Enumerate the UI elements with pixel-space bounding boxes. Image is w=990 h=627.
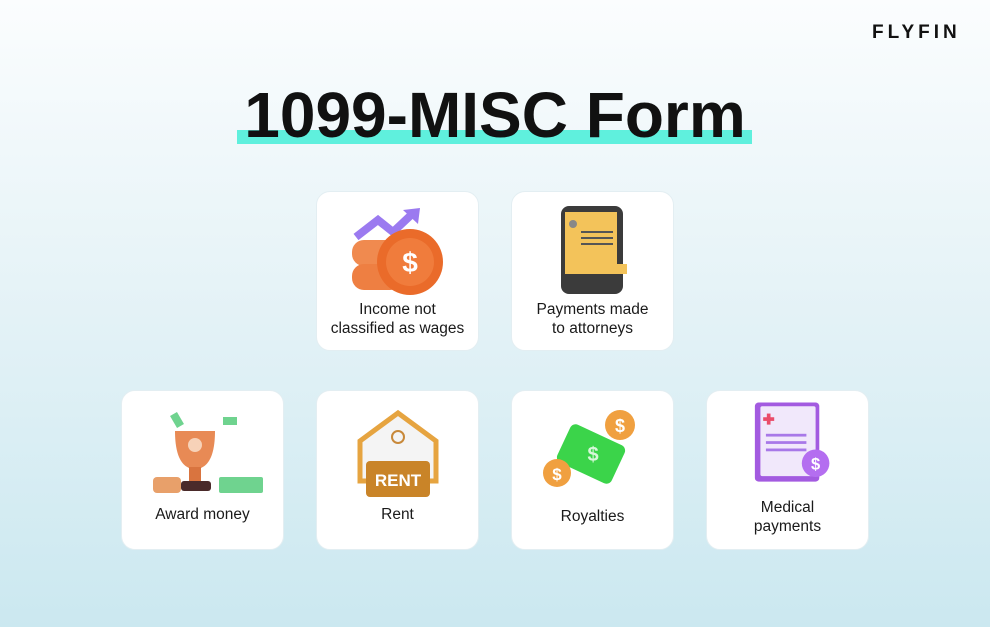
icon: coins with arrow [352,208,443,295]
card: medical: Medical [761,499,814,516]
title highlight [237,130,752,144]
icon: medical document: $ [811,455,820,474]
title: 1099-MISC Form [244,79,746,151]
icon: house: RENT [375,471,422,490]
logo: FLYFIN [872,22,961,43]
icon: money and coins: $ [587,444,599,466]
icon: money and coins: $ [615,416,625,436]
card: income [316,191,479,351]
card: award: Award money [155,506,250,523]
card: attorneys: to attorneys [552,320,633,337]
card: award [121,390,284,550]
card: attorneys: Payments made [536,301,648,318]
card: medical [706,390,869,550]
icon: money and coins: $ [552,465,562,484]
card: royalties [511,390,674,550]
card: rent [316,390,479,550]
card: income: Income not [359,301,436,318]
icon: house [358,410,438,497]
icon: trophy [153,412,263,493]
icon: money and coins [543,410,635,487]
card: attorneys [511,191,674,351]
icon: coins with arrow: $ [402,247,418,278]
card: rent: Rent [381,506,414,523]
card: royalties: Royalties [561,508,624,525]
icon: clipboard [561,206,627,294]
card: income: classified as wages [331,320,464,337]
card: medical: payments [754,518,821,535]
icon: medical document [754,402,830,482]
